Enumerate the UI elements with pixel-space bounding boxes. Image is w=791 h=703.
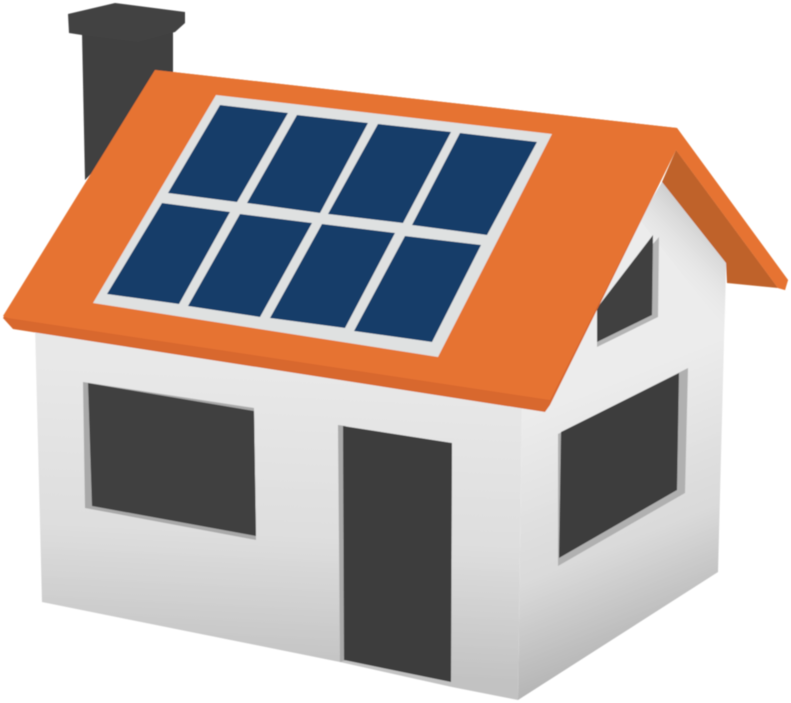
roof: gable underside <box>662 150 778 288</box>
window: side lower <box>558 368 688 566</box>
wall: front <box>35 325 522 700</box>
solar cells: bottom row <box>107 203 481 342</box>
solar cells: top row <box>168 105 537 235</box>
wall: side <box>518 182 726 700</box>
panel frame <box>93 95 552 357</box>
door <box>338 425 452 682</box>
window: side upper <box>597 235 659 347</box>
roof: main face <box>3 70 788 412</box>
window: front <box>83 382 256 540</box>
chimney <box>68 3 185 180</box>
solar panel <box>93 95 552 357</box>
